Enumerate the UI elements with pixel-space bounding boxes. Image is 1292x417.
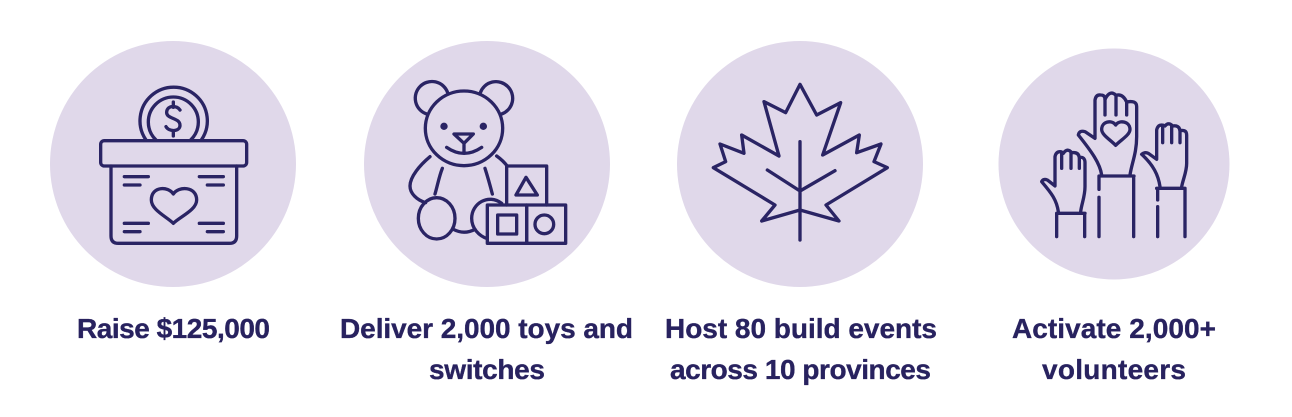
label: Raise $125,000: Raise $125,000 — [77, 313, 270, 344]
label: Activate 2,000+ volunteers: volunteers — [1042, 354, 1186, 385]
panel: host events — [665, 41, 937, 385]
panel: deliver toys — [340, 41, 633, 385]
icon: raised hands — [1042, 93, 1187, 237]
icon: donation box with coin — [101, 87, 247, 243]
label: Host 80 build events across 10 provinces: Host 80 build events — [665, 313, 937, 344]
label: Deliver 2,000 toys and switches — [340, 313, 633, 385]
label: Activate 2,000+ volunteers — [1012, 313, 1216, 385]
icon: maple leaf — [713, 84, 887, 240]
icon: teddy bear and blocks — [410, 82, 566, 243]
label: Deliver 2,000 toys and switches: Deliver 2,000 toys and — [340, 313, 633, 344]
label: Host 80 build events across 10 provinces: across 10 provinces — [670, 354, 931, 385]
background circle 2 — [364, 41, 610, 287]
panel: activate volunteers — [998, 48, 1230, 385]
label: Host 80 build events across 10 provinces — [665, 313, 937, 385]
panel: raise money — [50, 41, 296, 344]
background circle 3 — [677, 41, 923, 287]
label: Activate 2,000+ volunteers: Activate 2,000+ — [1012, 313, 1216, 344]
background circle 4 — [998, 48, 1230, 280]
label: Deliver 2,000 toys and switches: switches — [429, 354, 545, 385]
background circle 1 — [50, 41, 296, 287]
